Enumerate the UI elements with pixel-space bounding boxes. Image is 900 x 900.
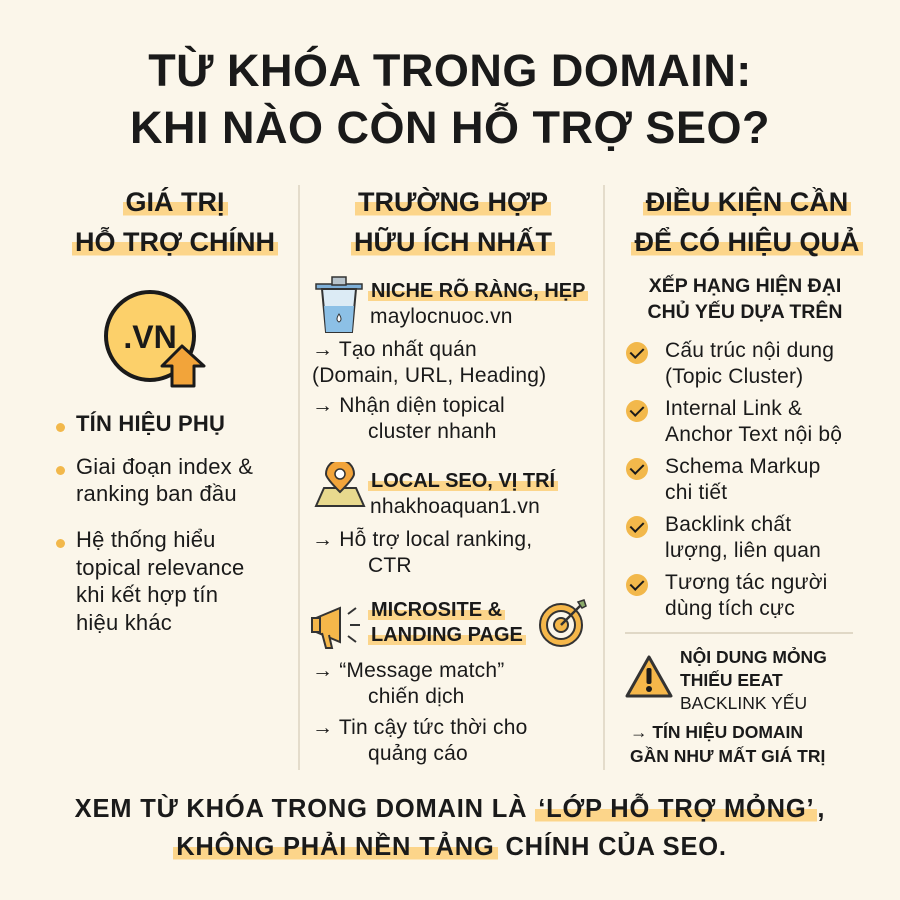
heading: right: ĐIỀU KIỆN CẦN [646, 187, 848, 217]
bullet list: Giai đoạn index & [76, 454, 253, 479]
warning text: THIẾU EEAT [680, 670, 783, 690]
case: local seo: → Hỗ trợ local ranking, [312, 528, 532, 551]
case: niche: → Nhận diện topical [312, 394, 505, 417]
subheading [648, 274, 842, 323]
panel: middle [311, 187, 588, 765]
checklist: Backlink chất [665, 513, 791, 536]
checklist: Internal Link & [665, 397, 802, 420]
footer [74, 794, 825, 861]
heading: left: HỖ TRỢ CHÍNH [75, 227, 275, 257]
bullet list: topical relevance [76, 554, 244, 580]
case: microsite: → “Message match” [312, 659, 504, 682]
checklist: chi tiết [665, 481, 727, 504]
footer: XEM TỪ KHÓA TRONG DOMAIN LÀ ‘LỚP HỖ TRỢ MỎNG’, [75, 795, 825, 823]
heading: right: ĐỂ CÓ HIỆU QUẢ [634, 227, 860, 257]
title: TỪ KHÓA TRONG DOMAIN: [148, 45, 752, 96]
panel: left [56, 187, 278, 634]
case: niche [312, 278, 588, 443]
icon: megaphone [311, 606, 360, 649]
bullet list: Hệ thống hiểu [76, 527, 216, 552]
title: KHI NÀO CÒN HỖ TRỢ SEO? [130, 102, 770, 153]
icon: water filter [315, 276, 363, 333]
subheading: XẾP HẠNG HIỆN ĐẠI [649, 275, 841, 297]
icon: target [539, 599, 587, 647]
dividers [298, 185, 300, 770]
warning text [680, 647, 827, 713]
case: microsite: → Tin cậy tức thời cho [312, 716, 527, 739]
case: niche: maylocnuoc.vn [370, 305, 513, 328]
case: local seo: CTR [368, 554, 412, 577]
bullet list: ranking ban đầu [76, 481, 237, 506]
icon: warning [626, 655, 673, 698]
checklist: Tương tác người [665, 571, 828, 594]
conclusion: → TÍN HIỆU DOMAIN [630, 722, 803, 742]
case: local seo: LOCAL SEO, VỊ TRÍ [371, 470, 555, 492]
case: microsite: MICROSITE & [371, 599, 502, 621]
bullet list: TÍN HIỆU PHỤ [76, 411, 225, 436]
case: local seo: nhakhoaquan1.vn [370, 495, 540, 518]
bullet list: khi kết hợp tín [76, 582, 218, 607]
case: niche: → Tạo nhất quán [312, 338, 477, 361]
title [130, 45, 770, 153]
bullet list [56, 411, 253, 634]
bullet list: hiệu khác [76, 610, 172, 634]
warning text: BACKLINK YẾU [680, 693, 807, 713]
heading: left: GIÁ TRỊ [126, 187, 224, 217]
panel: right [625, 186, 863, 766]
case: niche: cluster nhanh [368, 420, 497, 443]
checklist: Schema Markup [665, 455, 820, 478]
checklist: Anchor Text nội bộ [665, 423, 842, 446]
heading: middle: TRƯỜNG HỢP [358, 187, 548, 217]
checklist [626, 339, 842, 620]
subheading: CHỦ YẾU DỰA TRÊN [648, 301, 842, 323]
checklist: dùng tích cực [665, 597, 795, 620]
icon: .VN badge [104, 290, 206, 388]
case: local seo [312, 469, 558, 577]
checklist: (Topic Cluster) [665, 365, 803, 388]
case: microsite [312, 599, 527, 765]
warning text: NỘI DUNG MỎNG [680, 647, 827, 667]
icon: map pin [314, 462, 366, 507]
heading: middle [351, 187, 555, 257]
heading: right [631, 186, 863, 257]
conclusion [630, 722, 825, 766]
heading: left [72, 187, 278, 257]
checklist: Cấu trúc nội dung [665, 339, 834, 362]
case: niche: (Domain, URL, Heading) [312, 364, 546, 387]
conclusion: GẦN NHƯ MẤT GIÁ TRỊ [630, 746, 825, 766]
footer: KHÔNG PHẢI NỀN TẢNG CHÍNH CỦA SEO. [176, 833, 727, 861]
case: microsite: chiến dịch [368, 685, 465, 708]
case: microsite: LANDING PAGE [371, 624, 523, 646]
case: niche: NICHE RÕ RÀNG, HẸP [371, 280, 585, 302]
icon: .VN badge: .VN [123, 319, 177, 355]
heading: middle: HỮU ÍCH NHẤT [354, 227, 552, 257]
checklist: lượng, liên quan [665, 539, 821, 562]
case: microsite: quảng cáo [368, 742, 468, 765]
